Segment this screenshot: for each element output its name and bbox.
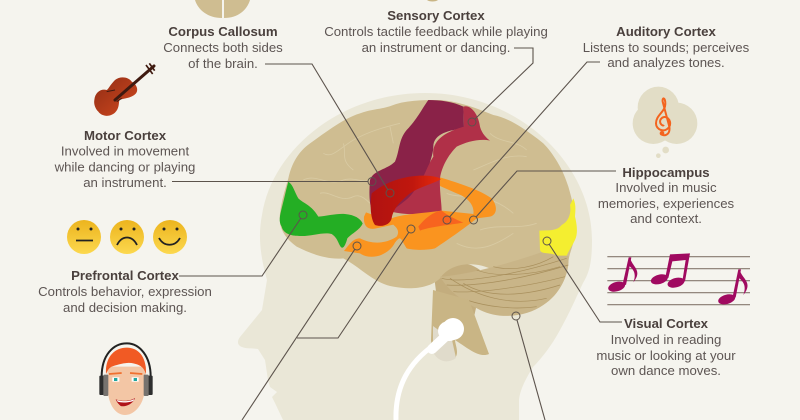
text: sensory cortex: Sensory Cortex [387,8,485,23]
text: motor cortex: an instrument. [83,175,167,190]
brain illustration [280,100,577,320]
music staff with notes [607,253,750,306]
callout markers [299,118,551,320]
purple cortex region [369,100,464,215]
text: prefrontal cortex: Controls behavior, expression [38,284,212,299]
text: hippocampus: Hippocampus [622,165,710,180]
text: hippocampus: memories, experiences [598,196,735,211]
icon: neutral face [67,220,101,254]
text: corpus callosum: of the brain. [188,56,258,71]
cerebellum [440,252,569,316]
text: visual cortex [596,316,736,378]
text: sensory cortex: an instrument or dancing. [362,40,510,55]
text: auditory cortex [583,24,750,70]
text: prefrontal cortex [38,268,212,315]
text: visual cortex: Visual Cortex [624,316,709,331]
text: prefrontal cortex: and decision making. [63,300,187,315]
text: corpus callosum: Corpus Callosum [168,24,278,39]
head silhouette [238,93,592,420]
brain folds [303,123,537,248]
icon: happy face [153,220,187,254]
sensory cortex region [392,106,490,214]
text: hippocampus [598,165,735,226]
small brain icon [195,0,250,18]
auditory region [418,211,463,231]
text: visual cortex: music or looking at your [596,348,736,363]
text: motor cortex: Involved in movement [61,144,189,158]
text: corpus callosum [163,24,283,71]
icon: boy with headphones [99,343,153,415]
upper head shading at ear [431,290,489,360]
text: auditory cortex: Listens to sounds; perceives [583,40,750,55]
motor cortex overlap [371,176,441,226]
text: sensory cortex: Controls tactile feedback while playing [324,24,548,39]
text: motor cortex: while dancing or playing [54,160,195,174]
text: motor cortex [54,128,195,190]
text: corpus callosum: Connects both sides [163,40,283,55]
visual cortex region [539,198,577,256]
pale neck shape [433,326,456,361]
text: hippocampus: Involved in music [615,180,717,195]
callout leader lines [172,48,622,420]
text: sensory cortex [324,8,548,55]
prefrontal cortex region [280,182,363,248]
icon fragment top centre [427,0,438,2]
hippocampus region [344,177,496,257]
text: motor cortex: Motor Cortex [84,128,167,143]
text: visual cortex: Involved in reading [611,332,721,347]
icon: violin [94,63,155,116]
text: hippocampus: and context. [630,211,702,226]
icon: thought cloud with treble clef [633,87,697,158]
text: auditory cortex: and analyzes tones. [607,55,725,70]
text: visual cortex: own dance moves. [611,363,721,378]
earbud and cord [396,318,464,420]
brain stem [433,262,480,320]
icon: sad face [110,220,144,254]
text: auditory cortex: Auditory Cortex [616,24,716,39]
text: prefrontal cortex: Prefrontal Cortex [71,268,180,283]
cerebrum [280,100,576,288]
